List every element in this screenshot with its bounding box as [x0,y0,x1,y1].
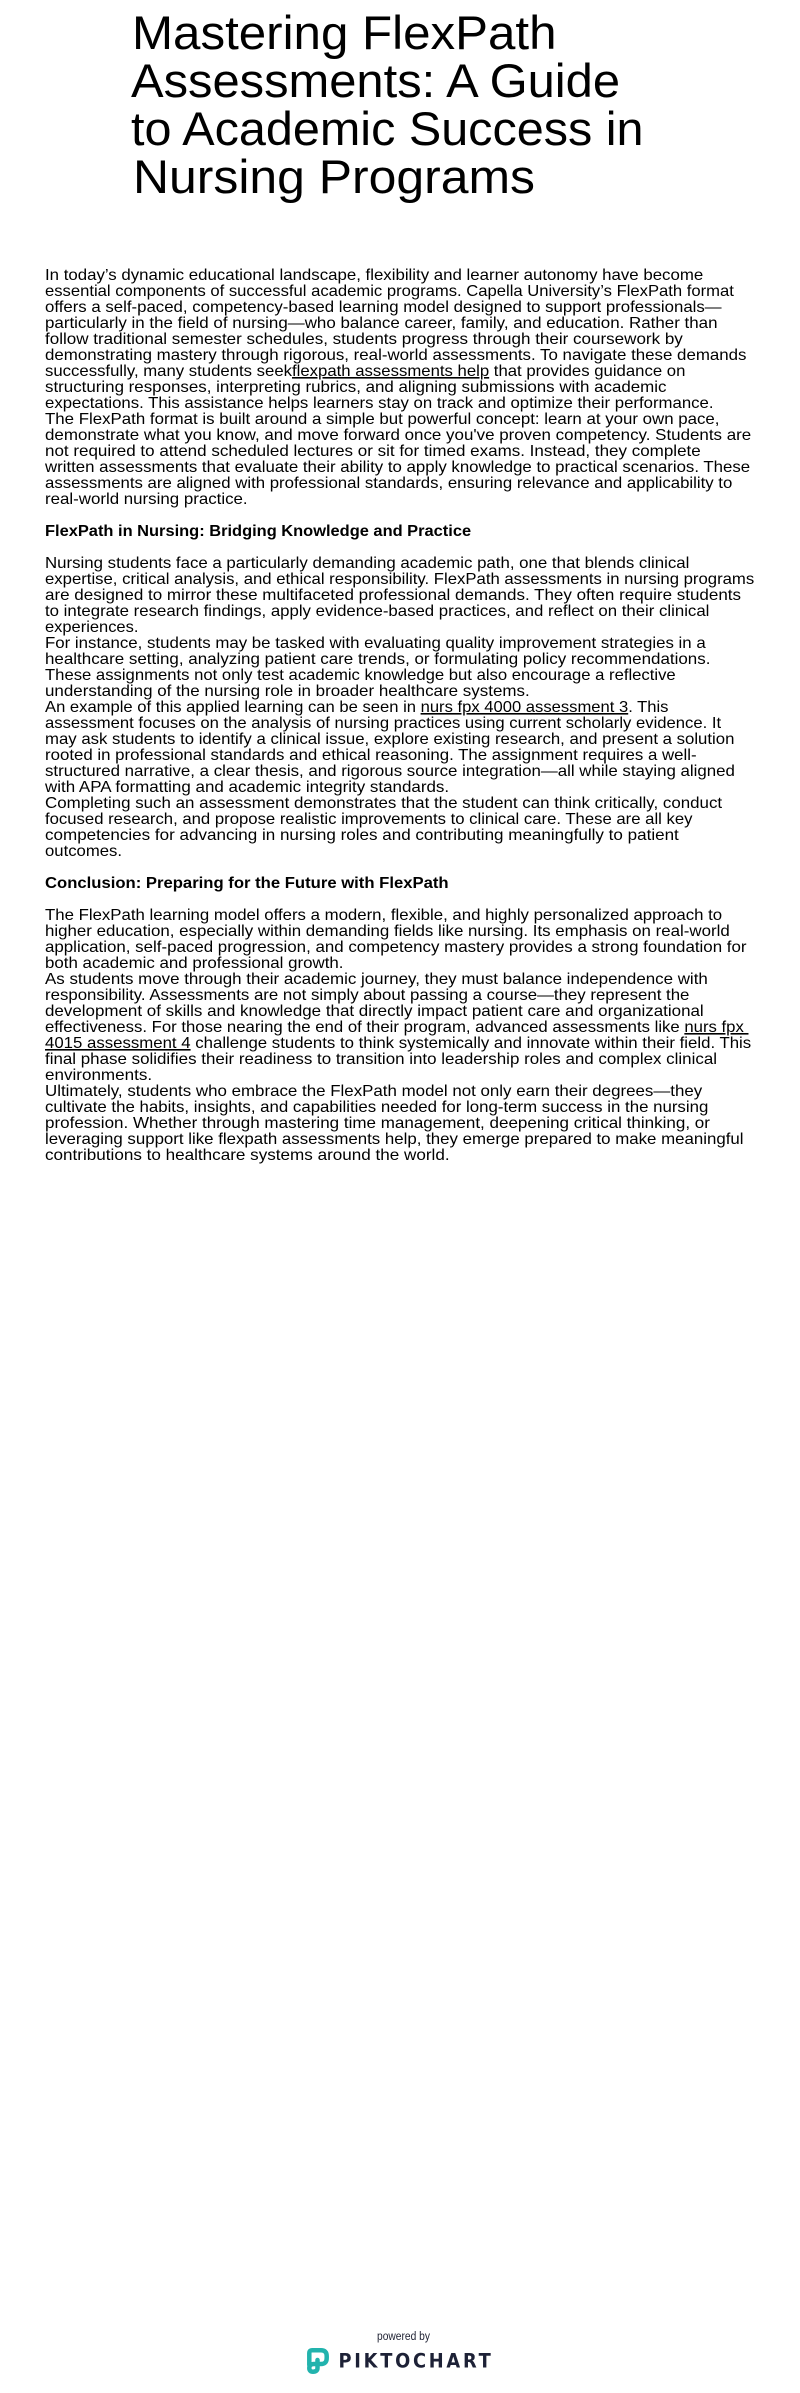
text block: Conclusion: both academic and professional growth. [45,955,344,972]
powered by label: powered by [377,2331,430,2343]
text block: FlexPath in Nursing: are designed to mirror these multifaceted professional demands. They often require students [45,587,741,604]
text block: FlexPath in Nursing: An example of this applied learning can be seen in nurs fpx 4000 assessment 3 . This [45,699,668,716]
text block: FlexPath in Nursing: healthcare setting, analyzing patient care trends, or formulating policy recommendations. [45,651,710,668]
text block: introduction: The FlexPath format is built around a simple but powerful concept: learn at your own pace, [45,411,719,428]
title: Nursing Programs [133,150,535,203]
text block: FlexPath in Nursing: For instance, students may be tasked with evaluating quality improvement strategies in a [45,635,706,652]
text block: introduction: follow traditional semester schedules, students progress through their coursework by [45,331,683,348]
text block: FlexPath in Nursing: experiences. [45,619,138,636]
text block: introduction: written assessments that evaluate their ability to apply knowledge to practical scenarios. These [44,459,750,476]
heading: FlexPath in Nursing: FlexPath in Nursing: Bridging Knowledge and Practice [45,523,471,540]
title: Mastering FlexPath [132,6,556,59]
text block: introduction: structuring responses, interpreting rubrics, and aligning submissions with academic [45,379,666,396]
text block: introduction [44,267,751,508]
text block: FlexPath in Nursing: understanding of the nursing role in broader healthcare systems. [45,683,530,700]
text block: Conclusion: 4015 assessment 4 challenge students to think systemically and innovate within their field. This [45,1035,751,1052]
title: to Academic Success in [131,102,644,155]
text block: Conclusion [45,907,751,1164]
text block: FlexPath in Nursing: rooted in professional standards and ethical reasoning. The assignment requires a well- [45,747,697,764]
text block: introduction: demonstrating mastery through rigorous, real-world assessments. To navigate these demands [45,347,746,364]
text block: FlexPath in Nursing: focused research, and propose realistic improvements to clinical care. These are all key [45,811,692,828]
text block: FlexPath in Nursing: structured narrative, a clear thesis, and rigorous source integration—all while staying aligned [45,763,735,780]
text block: FlexPath in Nursing: expertise, critical analysis, and ethical responsibility. FlexPath assessments in nursing programs [45,571,754,588]
text block: FlexPath in Nursing: with APA formatting and academic integrity standards. [44,779,449,796]
text block: Conclusion: The FlexPath learning model offers a modern, flexible, and highly personalized approach to [45,907,722,924]
text block: FlexPath in Nursing: to integrate research findings, apply evidence-based practices, and reflect on their clinical [45,603,709,620]
text block: introduction: successfully, many students seek flexpath assessments help that provides guidance on [45,363,685,380]
text block: Conclusion: leveraging support like flexpath assessments help, they emerge prepared to make meaningful [45,1131,744,1148]
text block: Conclusion: profession. Whether through mastering time management, deepening critical thinking, or [45,1115,711,1132]
text block: FlexPath in Nursing: assessment focuses on the analysis of nursing practices using current scholarly evidence. It [45,715,722,732]
text block: Conclusion: contributions to healthcare systems around the world. [45,1147,450,1164]
footer: powered by Piktochart [309,2331,494,2372]
title: Assessments: A Guide [131,54,620,107]
text block: introduction: In today’s dynamic educational landscape, flexibility and learner autonomy have become [45,267,703,284]
icon: Piktochart logo [309,2350,327,2372]
text block: introduction: essential components of successful academic programs. Capella University’s FlexPath format [45,283,734,300]
text block: FlexPath in Nursing: Nursing students face a particularly demanding academic path, one that blends clinical [45,555,689,572]
text block: introduction: demonstrate what you know, and move forward once you've proven competency. Students are [45,427,751,444]
text block: FlexPath in Nursing: These assignments not only test academic knowledge but also encourage a reflective [45,667,676,684]
text block: Conclusion: final phase solidifies their readiness to transition into leadership roles and complex clinical [45,1051,717,1068]
text block: Conclusion: application, self-paced progression, and competency mastery provides a strong foundation for [45,939,747,956]
text block: Conclusion: higher education, especially within demanding fields like nursing. Its emphasis on real-world [45,923,730,940]
text block: introduction: particularly in the field of nursing—who balance career, family, and education. Rather than [45,315,718,332]
text block: introduction: not required to attend scheduled lectures or sit for timed exams. Instead, they complete [45,443,701,460]
text block: FlexPath in Nursing: may ask students to identify a clinical issue, explore existing research, and present a solution [45,731,734,748]
wordmark: Piktochart: PIKTOCHART [338,2349,494,2372]
text block: Conclusion: responsibility. Assessments are not simply about passing a course—they represent the [45,987,690,1004]
text block: Conclusion: effectiveness. For those nearing the end of their program, advanced assessments like nurs fpx [45,1019,748,1036]
text block: introduction: assessments are aligned with professional standards, ensuring relevance and applicability to [45,475,732,492]
text block: Conclusion: development of skills and knowledge that directly impact patient care and organizational [45,1003,704,1020]
text block: Conclusion: As students move through their academic journey, they must balance independence with [45,971,708,988]
text block: FlexPath in Nursing: Completing such an assessment demonstrates that the student can think critically, conduct [45,795,723,812]
text block: Conclusion: environments. [45,1067,152,1084]
text block: introduction: offers a self-paced, competency-based learning model designed to support professionals— [45,299,722,316]
heading: Conclusion: Conclusion: Preparing for the Future with FlexPath [45,875,449,892]
text block: Conclusion: cultivate the habits, insights, and capabilities needed for long-term success in the nursing [45,1099,708,1116]
text block: FlexPath in Nursing: competencies for advancing in nursing roles and contributing meaningfully to patient [45,827,679,844]
text block: FlexPath in Nursing: outcomes. [45,843,122,860]
text block: Conclusion: Ultimately, students who embrace the FlexPath model not only earn their degrees—they [45,1083,702,1100]
text block: FlexPath in Nursing [44,555,754,860]
text block: introduction: expectations. This assistance helps learners stay on track and optimize their performance. [45,395,714,412]
text block: introduction: real-world nursing practice. [45,491,248,508]
title [131,6,644,203]
